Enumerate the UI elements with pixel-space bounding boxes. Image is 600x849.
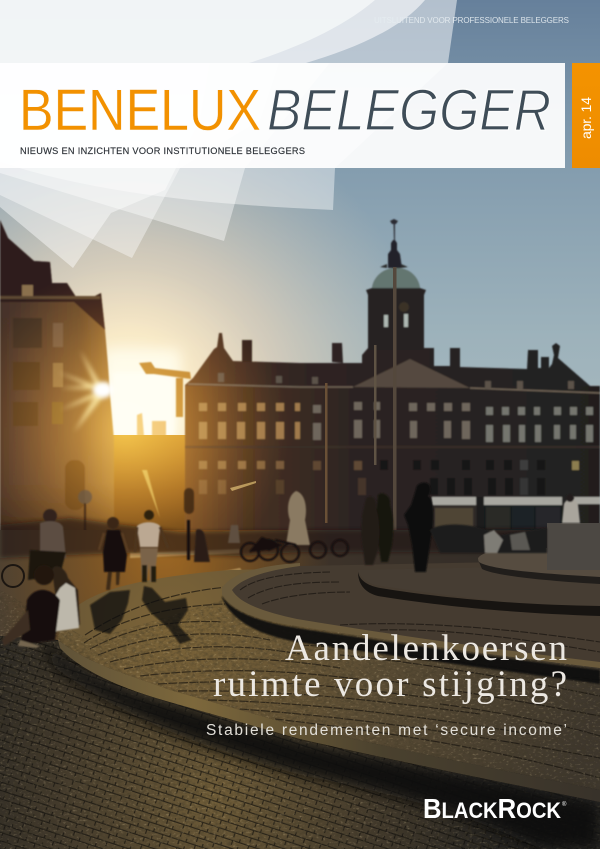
subheadline: Stabiele rendementen met ‘secure income’ <box>206 722 567 739</box>
belfry openings <box>384 315 388 327</box>
BlackRock logo: BLACKROCK <box>423 793 561 824</box>
roof of left building <box>0 220 105 330</box>
dormer windows <box>218 373 574 389</box>
two women <box>376 493 393 562</box>
raised platform with curb <box>222 560 600 684</box>
top sheet arc two <box>0 0 375 63</box>
pedestrians far away <box>187 520 240 562</box>
palace facade <box>185 386 600 545</box>
person in white shirt <box>562 500 580 523</box>
top sheet outer <box>0 0 457 63</box>
crowd band at street level <box>0 518 600 558</box>
cobble highlights <box>0 590 600 849</box>
headline <box>213 628 567 705</box>
cornice lines <box>188 384 600 393</box>
bicycle <box>2 565 24 587</box>
cobble dark texture <box>0 590 600 849</box>
lower sheets <box>0 63 335 268</box>
long shadows of pedestrians <box>90 586 192 644</box>
street between the buildings <box>108 435 198 545</box>
seated couple <box>2 565 80 648</box>
raised steps on the right <box>358 523 600 616</box>
headline: ruimte voor stijging? <box>213 664 567 705</box>
man walking <box>135 510 168 582</box>
top sheet arc one <box>0 0 425 63</box>
BlackRock logo: ® <box>562 801 567 808</box>
lit cobbled circle <box>58 560 600 795</box>
low dark cobbled foreground <box>0 636 600 849</box>
figures on the left <box>2 509 240 648</box>
pediment <box>353 359 470 388</box>
headline: Aandelenkoersen <box>285 628 567 669</box>
sheet: lowest-left <box>0 168 176 268</box>
parked bicycles <box>241 538 348 562</box>
issue date: apr. 14 <box>578 97 594 139</box>
woman in black dress <box>99 517 128 590</box>
palace lower arched windows <box>313 460 579 495</box>
translucent paper sheets <box>0 0 457 268</box>
palace windows: central group <box>313 402 470 440</box>
sun core <box>112 372 174 436</box>
person in grey shirt <box>28 509 66 580</box>
orange low-sun glow over the buildings <box>0 262 295 552</box>
palace windows: left warm group <box>199 403 300 494</box>
statue <box>286 491 310 545</box>
sheet: largest <box>153 168 335 210</box>
royal palace <box>185 219 600 547</box>
windows of left building <box>0 285 100 510</box>
distant city silhouette <box>137 413 166 436</box>
concentric cobble rows <box>84 586 600 778</box>
palace windows: right group <box>486 407 593 442</box>
left corner building <box>0 220 114 548</box>
sun disc <box>104 350 180 442</box>
sun flare rays <box>58 350 256 518</box>
construction crane <box>139 362 191 417</box>
masthead band <box>0 63 565 168</box>
title: BENELUX: BENELUX <box>19 78 261 143</box>
shop awnings <box>432 497 600 547</box>
man in dark shirt <box>404 482 433 572</box>
sky with sunset glow <box>0 0 600 560</box>
lamp posts <box>325 267 396 547</box>
palace roof and cornice <box>185 333 600 450</box>
figures on the right <box>286 482 580 572</box>
sheet: third <box>0 168 245 241</box>
title: BELEGGER: BELEGGER <box>267 78 551 143</box>
street furniture in the glow <box>78 488 194 553</box>
sheet: second <box>0 168 180 258</box>
palace tower and dome <box>366 219 426 350</box>
tagline: NIEUWS EN INZICHTEN VOOR INSTITUTIONELE BELEGGERS <box>20 146 305 156</box>
seated crowd <box>430 525 547 553</box>
shadow below the big curb <box>40 640 600 849</box>
orange date tab <box>572 63 600 168</box>
plaza ground <box>0 530 600 849</box>
big stone curb <box>58 640 600 802</box>
small top line: UITSLUITEND VOOR PROFESSIONELE BELEGGERS <box>374 16 569 25</box>
